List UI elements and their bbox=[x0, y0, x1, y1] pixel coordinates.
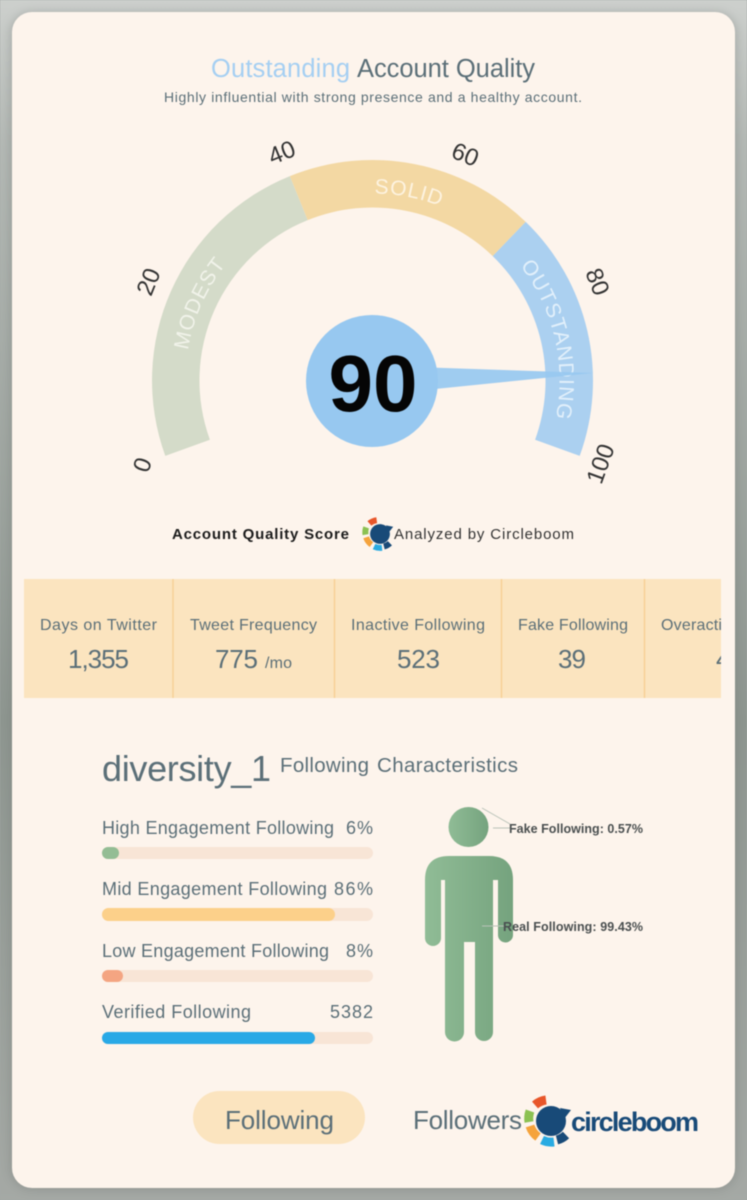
stat: overactive, clipped bbox=[661, 618, 722, 665]
stat: inactive following: 523 bbox=[397, 644, 440, 674]
bar: low engagement: Low Engagement Following bbox=[102, 941, 329, 961]
tick 20: 20 bbox=[131, 265, 167, 299]
stat: days on twitter: Days on Twitter bbox=[40, 617, 158, 634]
person chart bbox=[425, 807, 643, 1042]
title bbox=[211, 55, 535, 83]
label: real following: Real Following: 99.43% bbox=[503, 920, 643, 934]
tab: followers: Followers bbox=[413, 1105, 522, 1135]
tick 100: 100 bbox=[581, 441, 621, 487]
account name: diversity_1 bbox=[102, 748, 271, 789]
stats band bbox=[24, 579, 739, 698]
bar: high engagement: High Engagement Following bbox=[102, 818, 334, 838]
icon: small circleboom logo bbox=[365, 520, 393, 548]
stat: overactive, clipped: 4 bbox=[716, 644, 730, 674]
title rest: Account Quality bbox=[357, 55, 535, 83]
bar: low engagement bbox=[102, 941, 373, 982]
tab: following bbox=[193, 1091, 365, 1144]
analyzed by: Analyzed by Circleboom bbox=[394, 526, 574, 543]
person body bbox=[425, 856, 513, 1042]
stat: inactive following bbox=[351, 617, 485, 674]
label: fake following: Fake Following: 0.57% bbox=[509, 822, 643, 836]
bars bbox=[102, 818, 373, 1044]
stat: tweet frequency: 775 bbox=[215, 644, 258, 674]
stat: tweet frequency: /mo bbox=[265, 655, 292, 672]
stat: days on twitter: 1,355 bbox=[68, 644, 129, 674]
gauge bbox=[128, 135, 621, 487]
bar: mid engagement: Mid Engagement Following bbox=[102, 879, 327, 899]
heading characteristics: Characteristics bbox=[377, 754, 518, 777]
subtitle: Highly influential with strong presence and a healthy account. bbox=[164, 89, 582, 105]
stat: days on twitter bbox=[40, 617, 158, 674]
score value: 90 bbox=[329, 339, 417, 428]
gauge segment: solid bbox=[290, 160, 526, 256]
leader lines bbox=[482, 808, 510, 926]
bar: verified: 5382 bbox=[330, 1002, 373, 1022]
circleboom logo bbox=[529, 1100, 699, 1142]
stat: inactive following: Inactive Following bbox=[351, 617, 485, 634]
person head bbox=[448, 807, 488, 847]
needle bbox=[430, 368, 593, 390]
title highlight: Outstanding bbox=[211, 55, 350, 83]
tick 60: 60 bbox=[448, 137, 482, 173]
tick 0: 0 bbox=[128, 454, 158, 476]
tab label: following: Following bbox=[225, 1105, 334, 1135]
bar: verified: Verified Following bbox=[102, 1002, 251, 1022]
bar: high engagement bbox=[102, 818, 373, 859]
bar: mid engagement bbox=[102, 879, 373, 921]
stat: tweet frequency: Tweet Frequency bbox=[190, 617, 317, 634]
segment label: outstanding: OUTSTANDING bbox=[522, 260, 574, 418]
tick 80: 80 bbox=[579, 265, 615, 299]
tick 40: 40 bbox=[265, 135, 299, 171]
segment label: modest: MODEST bbox=[174, 256, 222, 349]
bar: verified bbox=[102, 1002, 373, 1044]
bar: mid engagement: 86% bbox=[334, 879, 373, 899]
stat: fake following: Fake Following bbox=[518, 617, 628, 634]
bar: high engagement: 6% bbox=[346, 818, 373, 838]
stat: tweet frequency bbox=[190, 617, 317, 674]
caption label: Account Quality Score bbox=[172, 526, 349, 543]
dividers bbox=[173, 579, 644, 698]
score caption bbox=[172, 520, 574, 548]
gauge segment: outstanding bbox=[493, 222, 593, 456]
stat: overactive, clipped: Overactive bbox=[661, 617, 739, 634]
logo mark bbox=[529, 1100, 571, 1142]
stat: fake following: 39 bbox=[558, 644, 586, 674]
bar: low engagement: 8% bbox=[346, 941, 373, 961]
logo wordmark: circleboom bbox=[571, 1107, 699, 1137]
stat: fake following bbox=[518, 617, 628, 674]
gauge segment: modest bbox=[152, 176, 308, 456]
tick labels bbox=[128, 135, 621, 487]
tabs bbox=[193, 1091, 522, 1144]
score circle bbox=[306, 315, 438, 447]
heading following: Following bbox=[280, 754, 369, 777]
account heading bbox=[102, 748, 518, 789]
segment label: solid: SOLID bbox=[375, 178, 442, 204]
band background bbox=[24, 579, 721, 698]
